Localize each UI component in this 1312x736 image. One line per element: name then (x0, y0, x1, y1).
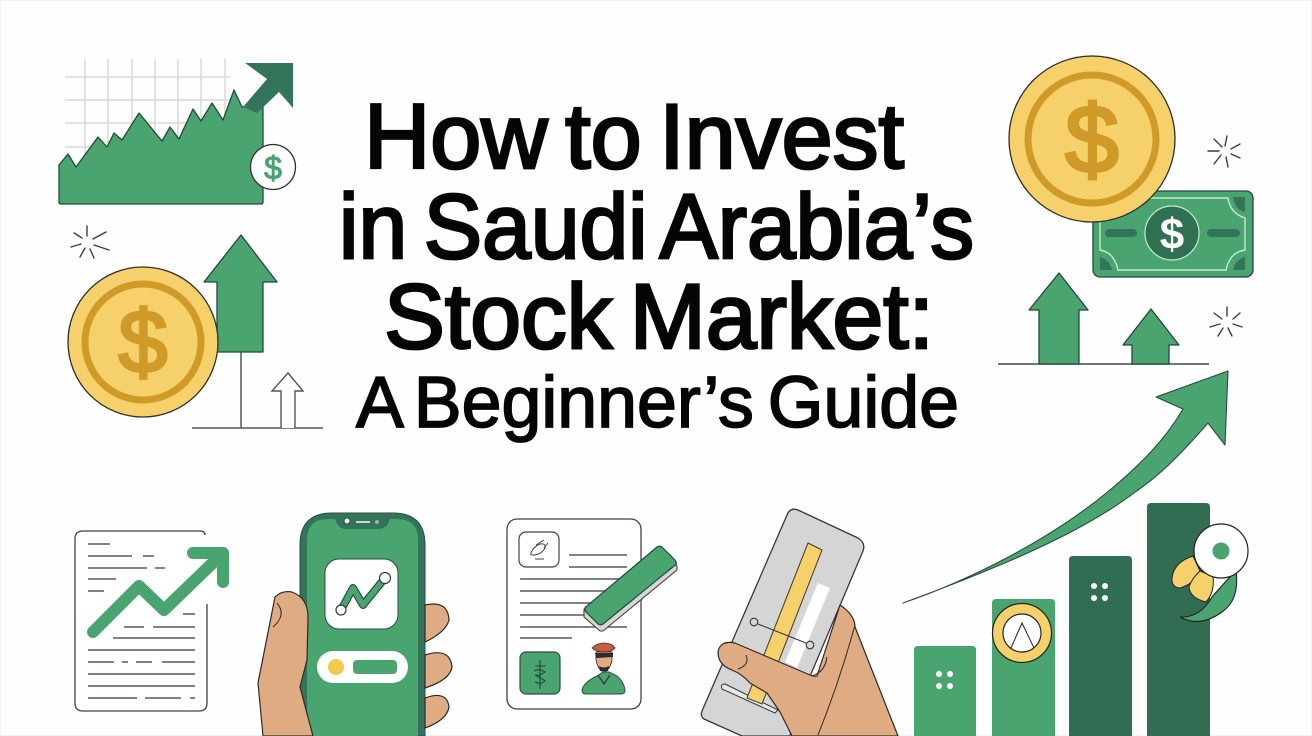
title: in Saudi Arabia’s (339, 176, 974, 278)
large curved growth arrow (903, 371, 1228, 603)
green stamp (584, 546, 677, 631)
gold coin left (68, 267, 218, 417)
official portrait (582, 643, 625, 694)
approval document with stamp (507, 519, 677, 709)
title: Stock Market: (384, 266, 934, 368)
dollar bill: $ (1160, 210, 1184, 259)
smartphone held in hand (258, 513, 452, 736)
hand (718, 605, 898, 736)
fingers (425, 604, 452, 728)
hand holding card (701, 509, 898, 736)
growth bar chart (914, 503, 1248, 736)
sparkle right top (1208, 136, 1240, 167)
area shape (59, 90, 263, 204)
dollar badge: $ (264, 150, 282, 186)
dollar bill (1093, 191, 1253, 277)
hand creases (738, 625, 855, 735)
phone body (300, 513, 425, 736)
logo tile (519, 532, 559, 567)
gold coin right (1009, 56, 1175, 222)
card (701, 509, 864, 736)
thumb (258, 592, 313, 736)
thumb nail (273, 603, 281, 627)
text lines (88, 544, 195, 698)
slider line (750, 618, 814, 649)
toggle pill (317, 651, 408, 683)
bar 2 with medallion (992, 599, 1055, 736)
title (339, 86, 974, 443)
area chart with grid and rising arrow (59, 59, 296, 204)
gold coin right: $ (1065, 86, 1119, 193)
green up arrow left (204, 235, 277, 428)
small outline arrow and baseline (192, 373, 323, 428)
green trend arrow (93, 553, 223, 632)
document lines (520, 555, 627, 638)
gold coin left: $ (119, 292, 167, 391)
title: How to Invest (364, 86, 904, 188)
green seal tile (520, 652, 560, 694)
bar 4 with emblem (1147, 503, 1248, 736)
bar 1 (914, 646, 976, 736)
title: A Beginner’s Guide (356, 363, 959, 443)
dollar badge (250, 144, 296, 190)
yellow bar (747, 543, 822, 704)
dark arrow (243, 63, 293, 113)
sparkle right bottom (1210, 307, 1242, 336)
white bar (785, 583, 830, 668)
two green up arrows on baseline (998, 273, 1209, 364)
sparkle left (71, 226, 109, 258)
bar 3 (1069, 556, 1132, 736)
document with rising arrow (75, 531, 223, 711)
app tile with chart (325, 559, 398, 629)
pill slot (721, 684, 778, 713)
